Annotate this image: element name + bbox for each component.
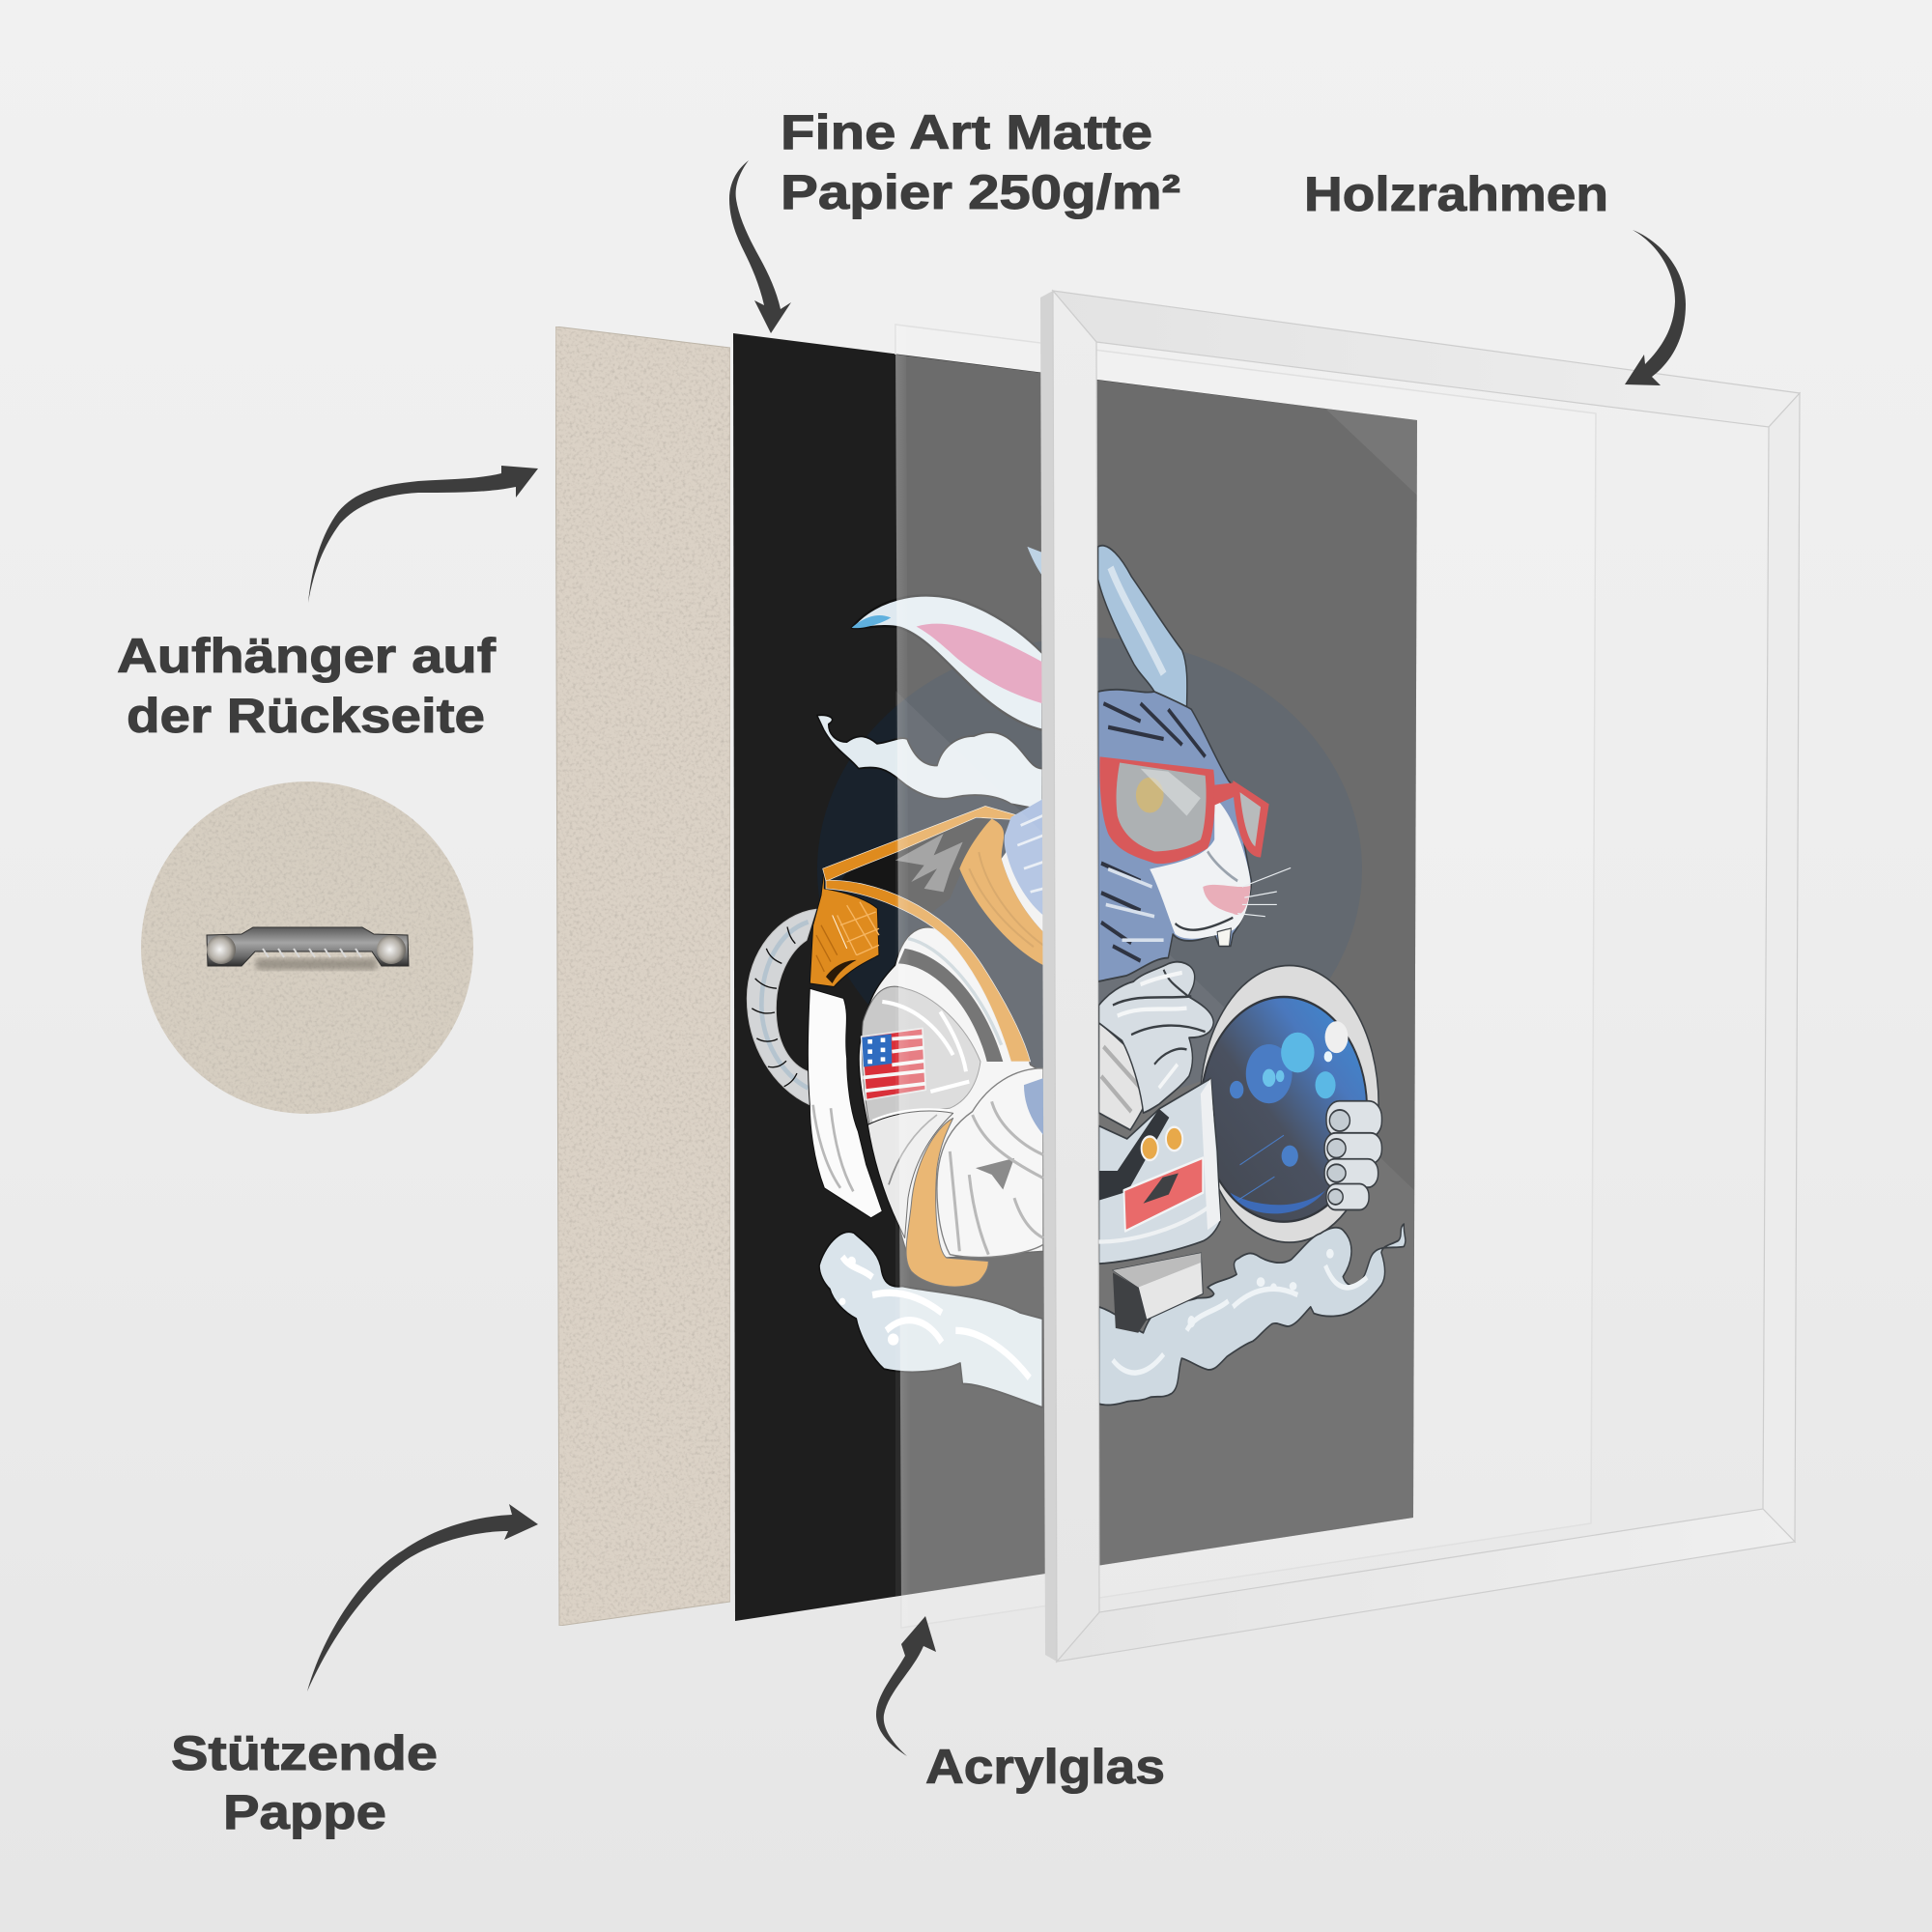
cardboard circle — [141, 781, 473, 1114]
label: Fine Art Matte Papier — [781, 105, 1180, 219]
label: Stützende Pappe: Stützende — [171, 1726, 438, 1780]
forearm — [937, 1068, 1043, 1257]
arrow: acrylic — [876, 1616, 936, 1756]
frame top bar — [1053, 291, 1800, 427]
illustration: rabbit astronaut, right part — [1098, 546, 1406, 1405]
chest control pack — [1099, 1078, 1220, 1264]
label: Fine Art Matte Papier: Fine Art Matte — [781, 105, 1152, 159]
arrow: Fine Art paper — [729, 160, 791, 333]
orange cuff — [906, 1119, 988, 1287]
illustration: background circle — [817, 638, 1362, 1101]
smoke wisp — [817, 715, 1042, 810]
backpack orange pad — [810, 867, 879, 986]
label: Aufhänger auf der Rückseite: der Rückseite — [127, 689, 485, 743]
smoke cloud right — [1099, 1224, 1406, 1405]
USA flag patch — [862, 1029, 925, 1100]
hanger shadow — [256, 958, 377, 970]
frame right bar — [1763, 393, 1800, 1542]
sawtooth hanger — [207, 927, 409, 966]
panel: cardboard backing — [555, 327, 730, 1626]
label: Acrylglas: Acrylglas — [925, 1740, 1165, 1794]
neck fur — [1005, 799, 1043, 922]
label: Aufhänger auf der Rückseite — [117, 629, 496, 743]
arrow: cardboard — [307, 1504, 538, 1691]
helmet ring — [1200, 966, 1378, 1242]
label: Stützende Pappe — [171, 1726, 438, 1839]
frame side shade — [1040, 291, 1057, 1662]
glove on chest — [1099, 962, 1213, 1113]
suit torso — [859, 927, 1043, 1258]
left ear — [852, 547, 1042, 730]
wooden frame — [1040, 291, 1800, 1662]
sawtooth hanger detail circle — [141, 781, 473, 1114]
right ear — [1098, 546, 1187, 709]
helmet visor — [1201, 997, 1367, 1222]
box under chest — [1113, 1253, 1203, 1333]
backpack white panel — [808, 988, 882, 1218]
label: Holzrahmen: Holzrahmen — [1304, 167, 1608, 221]
glove on helmet — [1324, 1101, 1381, 1209]
label: Aufhänger auf der Rückseite: Aufhänger auf — [117, 629, 496, 683]
acrylic glass sheet — [895, 325, 1596, 1628]
oxygen hose — [747, 909, 816, 1105]
nose, mouth and teeth — [1176, 867, 1291, 946]
arrow: hanger — [308, 466, 538, 603]
smoke cloud left — [819, 1232, 1042, 1407]
arrow: frame — [1625, 230, 1686, 385]
label: Stützende Pappe: Pappe — [223, 1785, 386, 1839]
illustration: astronaut suit left part — [747, 799, 1043, 1287]
curved orange strap and collar — [826, 819, 1043, 1062]
backpack top sail — [823, 806, 1017, 919]
rabbit head — [1098, 690, 1251, 981]
infographic canvas — [118, 113, 1801, 1839]
red glasses — [1099, 756, 1269, 864]
panel: black art paper — [733, 333, 1417, 1621]
sleeve — [1099, 1022, 1153, 1130]
frame left bar — [1053, 291, 1099, 1662]
label: Fine Art Matte Papier: Papier 250g/m² — [781, 165, 1180, 219]
frame bottom bar — [1057, 1509, 1795, 1662]
illustration: ear, smoke and cloud left — [817, 547, 1042, 1407]
glass reflections — [895, 409, 1430, 1642]
